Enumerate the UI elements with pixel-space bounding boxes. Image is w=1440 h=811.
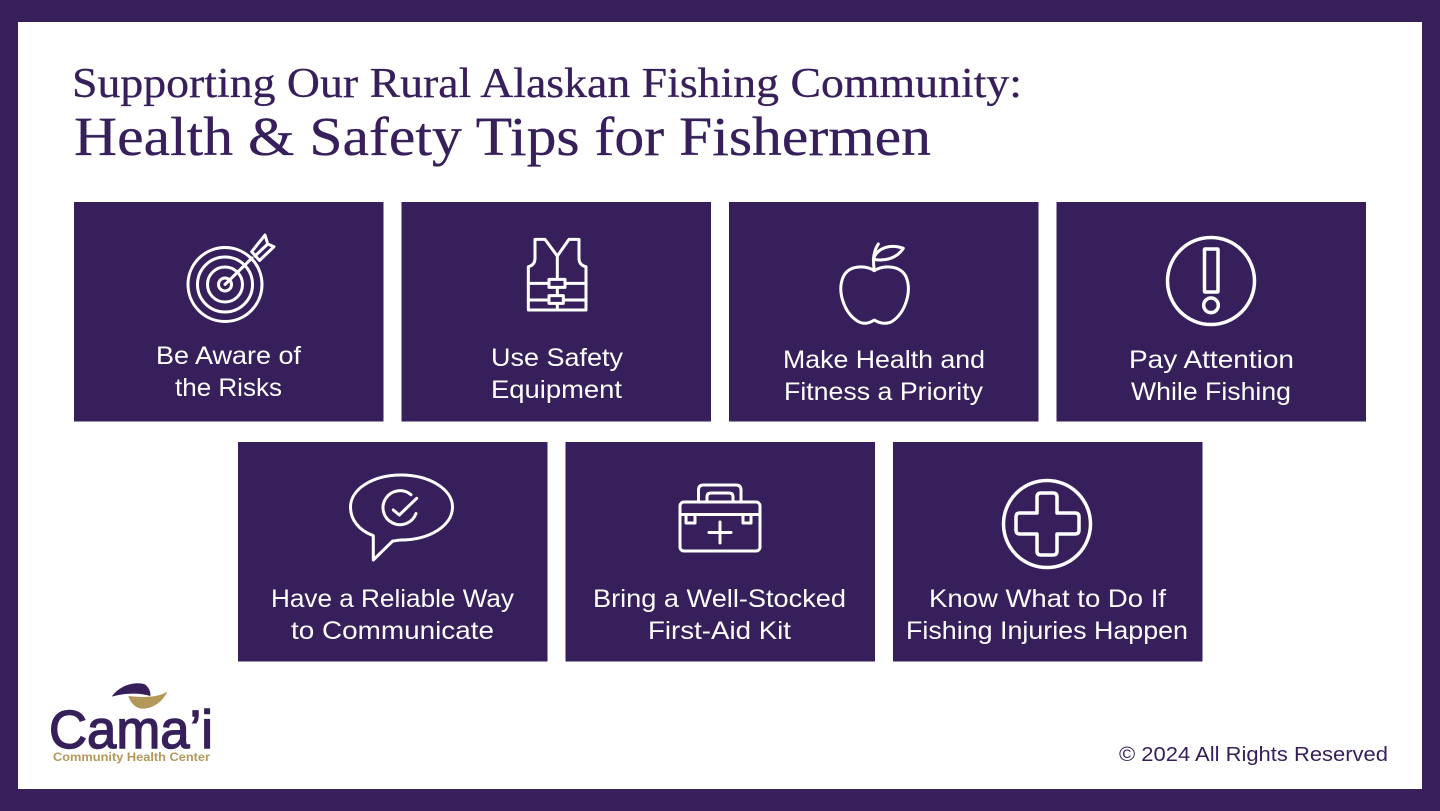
- label: [906, 585, 1188, 645]
- icon: first-aid kit: [680, 485, 760, 551]
- label: [783, 346, 985, 406]
- panel: Pay Attention While Fishing: [1056, 202, 1366, 422]
- label: Bring a Well-Stocked: [593, 585, 846, 613]
- icon: life vest: [528, 239, 586, 310]
- label: Use Safety: [491, 344, 624, 372]
- logo wordmark: Cama’i: [49, 700, 213, 760]
- label: Know What to Do If: [929, 585, 1166, 613]
- title: Health & Safety Tips for Fishermen: [74, 106, 931, 167]
- icon: medical cross in circle: [1004, 480, 1090, 568]
- label: to Communicate: [291, 617, 494, 645]
- label: Fishing Injuries Happen: [906, 617, 1188, 645]
- logo tagline: Community Health Center: [53, 752, 211, 764]
- label: Make Health and: [783, 346, 985, 374]
- label: Be Aware of: [156, 342, 301, 370]
- label: the Risks: [175, 374, 282, 402]
- icon: speech bubble with check: [350, 475, 452, 560]
- label: Have a Reliable Way: [271, 585, 515, 613]
- label: [593, 585, 846, 645]
- panel: Use Safety Equipment: [402, 202, 711, 422]
- label: [1129, 346, 1294, 406]
- label: [271, 585, 515, 645]
- panel: Bring a Well-Stocked First-Aid Kit: [566, 442, 875, 662]
- label: First-Aid Kit: [648, 617, 791, 645]
- icon: target with arrow: [188, 235, 274, 322]
- label: [156, 342, 301, 402]
- label: [491, 344, 624, 404]
- panel: Be Aware of the Risks: [74, 202, 384, 422]
- icon: logo emblem: [112, 683, 167, 709]
- logo: [49, 683, 213, 764]
- title: Supporting Our Rural Alaskan Fishing Community:: [72, 61, 1022, 107]
- copyright: © 2024 All Rights Reserved: [1119, 743, 1388, 766]
- icon: exclamation in circle: [1168, 238, 1254, 324]
- label: While Fishing: [1131, 378, 1291, 406]
- title: [72, 61, 1022, 167]
- icon: apple: [841, 244, 908, 323]
- label: Equipment: [491, 376, 622, 404]
- panel: Have a Reliable Way to Communicate: [238, 442, 548, 662]
- label: Fitness a Priority: [784, 378, 984, 406]
- panel: Know What to Do If Fishing Injuries Happen: [893, 442, 1202, 662]
- panel: Make Health and Fitness a Priority: [729, 202, 1038, 422]
- label: Pay Attention: [1129, 346, 1294, 374]
